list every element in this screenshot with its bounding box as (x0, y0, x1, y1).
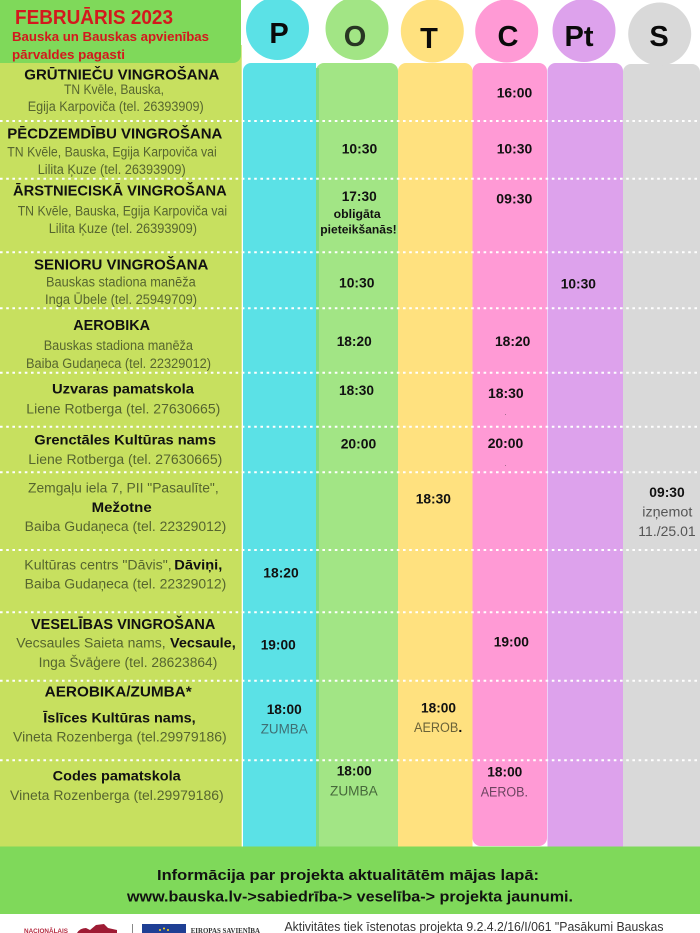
column: T (398, 63, 472, 848)
row: Uzvaras pamatskola: Liene Rotberga (tel. 27630665) (26, 401, 220, 416)
row: Mežotne: 09:30 (649, 484, 685, 500)
circle: O (326, 0, 388, 60)
row: Grenctāles Kultūras nams: Grenctāles Kultūras nams (34, 431, 216, 447)
day circles (246, 0, 691, 66)
row: Dāviņi: 18:20 (263, 565, 299, 581)
row: Dāviņi: Baiba Gudaņeca (tel. 22329012) (25, 577, 226, 592)
row: Mežotne (25, 481, 696, 539)
row: Aerobika/Zumba: Vineta Rozenberga (tel.29979186) (13, 730, 227, 745)
row: Mežotne: 18:30 (416, 490, 451, 506)
row: Grenctāles Kultūras nams: . (504, 462, 506, 468)
row: Grūtnieču vingrošana: GRŪTNIEČU VINGROŠANA (24, 66, 219, 84)
circle: S: S (649, 21, 669, 53)
row: Grūtnieču vingrošana: 16:00 (497, 84, 532, 100)
row: Uzvaras pamatskola: . (504, 411, 506, 417)
row: Aerobika/Zumba (13, 684, 462, 745)
row: Aerobika: Baiba Gudaņeca (tel. 22329012) (26, 356, 211, 371)
row: Dāviņi: Kultūras centrs "Dāvis", (24, 557, 172, 572)
row: Grūtnieču vingrošana (24, 66, 532, 114)
row: Senioru vingrošana: 10:30 (339, 275, 375, 291)
row: Grūtnieču vingrošana: Egija Karpoviča (tel. 26393909) (28, 99, 204, 114)
row: Dāviņi (24, 556, 299, 592)
row: Veselības vingrošana (16, 615, 529, 670)
row: Codes pamatskola: 18:00 (487, 764, 523, 780)
row: Aerobika: Bauskas stadiona manēža (44, 338, 193, 353)
column: O (316, 63, 398, 848)
row: Codes pamatskola: Codes pamatskola (53, 767, 181, 783)
row: Uzvaras pamatskola: 18:30 (488, 385, 524, 401)
row: Mežotne: Mežotne (92, 499, 152, 515)
footer text: Informācija par projekta aktualitātēm mājas lapā: (157, 867, 539, 884)
column: C (472, 63, 547, 846)
row: Ārstnieciskā vingrošana: ĀRSTNIECISKĀ VINGROŠANA (13, 182, 227, 200)
row: Aerobika/Zumba: 18:00 (421, 699, 456, 715)
row: Senioru vingrošana: Inga Ūbele (tel. 25949709) (45, 292, 197, 307)
row: Veselības vingrošana: VESELĪBAS VINGROŠANA (31, 615, 215, 633)
column: Pt (548, 63, 623, 848)
row: Veselības vingrošana: Vecsaule, (170, 634, 236, 650)
footer text (126, 867, 573, 906)
row: Uzvaras pamatskola: Uzvaras pamatskola (52, 380, 194, 396)
row: Pēcdzemdību vingrošana: PĒCDZEMDĪBU VINGROŠANA (7, 124, 222, 142)
row: Aerobika/Zumba: . (458, 719, 462, 735)
circle: C: C (498, 21, 519, 53)
row: Aerobika/Zumba: AEROBIKA/ZUMBA* (45, 684, 192, 701)
subtitle: Bauska un Bauskas apvienības (12, 29, 209, 44)
row: Grūtnieču vingrošana: TN Kvēle, Bauska, (64, 82, 164, 97)
circle: T (401, 0, 464, 62)
row: Mežotne: Zemgaļu iela 7, PII "Pasaulīte", (28, 481, 219, 496)
row: Uzvaras pamatskola: 18:30 (339, 382, 374, 398)
circle: P (246, 0, 309, 60)
row: Aerobika/Zumba: ZUMBA (261, 722, 308, 737)
row: Veselības vingrošana: 19:00 (494, 634, 529, 650)
subtitle: pārvaldes pagasti (12, 47, 125, 62)
footer text: www.bauska.lv->sabiedrība-> veselība-> projekta jaunumi. (126, 888, 573, 906)
logo: Nacionālais veselības dienests (24, 924, 117, 933)
row: Codes pamatskola: ZUMBA (330, 783, 378, 798)
row: Senioru vingrošana: SENIORU VINGROŠANA (34, 255, 208, 273)
row: Codes pamatskola (10, 762, 528, 803)
row: Codes pamatskola: Vineta Rozenberga (tel.29979186) (10, 788, 224, 803)
left panel background (0, 45, 242, 848)
row: Aerobika: 18:20 (337, 333, 372, 349)
row: Veselības vingrošana: Inga Švāģere (tel. 28623864) (39, 655, 217, 670)
row: Veselības vingrošana: 19:00 (261, 636, 296, 652)
row: Aerobika (26, 317, 531, 371)
row: Grenctāles Kultūras nams: Liene Rotberga (tel. 27630665) (28, 452, 222, 467)
row: Senioru vingrošana (34, 255, 596, 307)
row: Pēcdzemdību vingrošana: Lilita Ķuze (tel. 26393909) (38, 162, 186, 177)
row: Grenctāles Kultūras nams: 20:00 (488, 435, 524, 451)
circle: P: P (269, 18, 289, 50)
row: Pēcdzemdību vingrošana: 10:30 (497, 140, 532, 156)
row: Aerobika: 18:20 (495, 333, 531, 349)
row: Aerobika: AEROBIKA (73, 317, 150, 334)
row: Ārstnieciskā vingrošana: 17:30 (342, 188, 377, 204)
row: Mežotne: izņemot (642, 505, 693, 520)
column: P (243, 63, 316, 848)
row: Ārstnieciskā vingrošana: 09:30 (496, 190, 533, 206)
circle: Pt (552, 0, 616, 62)
row: Aerobika/Zumba: AEROB (414, 720, 458, 735)
title: FEBRUĀRIS 2023 (15, 7, 173, 29)
row: Pēcdzemdību vingrošana: TN Kvēle, Bauska, Egija Karpoviča vai (7, 145, 217, 160)
row: Mežotne: 11./25.01 (638, 524, 696, 539)
row: Ārstnieciskā vingrošana: TN Kvēle, Bauska, Egija Karpoviča vai (18, 204, 227, 219)
row: Grenctāles Kultūras nams (28, 431, 524, 468)
circle: T: T (420, 23, 438, 55)
row: Dāviņi: Dāviņi, (174, 556, 222, 572)
column: S (623, 64, 700, 848)
row: Pēcdzemdību vingrošana (7, 124, 532, 177)
subtitle (12, 29, 209, 62)
footer information band (0, 846, 700, 914)
circle: C (475, 0, 538, 62)
row: Aerobika/Zumba: 18:00 (267, 701, 302, 717)
row: Senioru vingrošana: Bauskas stadiona manēža (46, 275, 196, 290)
row: Ārstnieciskā vingrošana: obligāta (334, 207, 381, 221)
row: Uzvaras pamatskola (26, 380, 524, 417)
row: Ārstnieciskā vingrošana: Lilita Ķuze (tel. 26393909) (49, 221, 197, 236)
row: Mežotne: Baiba Gudaņeca (tel. 22329012) (25, 519, 226, 534)
logo: EU flag (142, 924, 260, 933)
row: Senioru vingrošana: 10:30 (561, 275, 596, 291)
circle: O: O (344, 21, 366, 53)
header panel (0, 0, 241, 63)
circle: S (628, 2, 691, 66)
row: Codes pamatskola: 18:00 (337, 762, 372, 778)
row: Aerobika/Zumba: Īslīces Kultūras nams, (42, 710, 196, 726)
row: Codes pamatskola: AEROB. (481, 784, 528, 799)
circle: Pt: Pt (564, 21, 594, 53)
column overlap strips (316, 68, 319, 848)
row: Ārstnieciskā vingrošana (13, 182, 533, 236)
row: Grenctāles Kultūras nams: 20:00 (341, 435, 377, 451)
day columns (243, 63, 700, 848)
row: Veselības vingrošana: Vecsaules Saieta nams, (16, 635, 166, 650)
row: Pēcdzemdību vingrošana: 10:30 (342, 140, 377, 156)
row: Ārstnieciskā vingrošana: pieteikšanās! (320, 222, 397, 236)
